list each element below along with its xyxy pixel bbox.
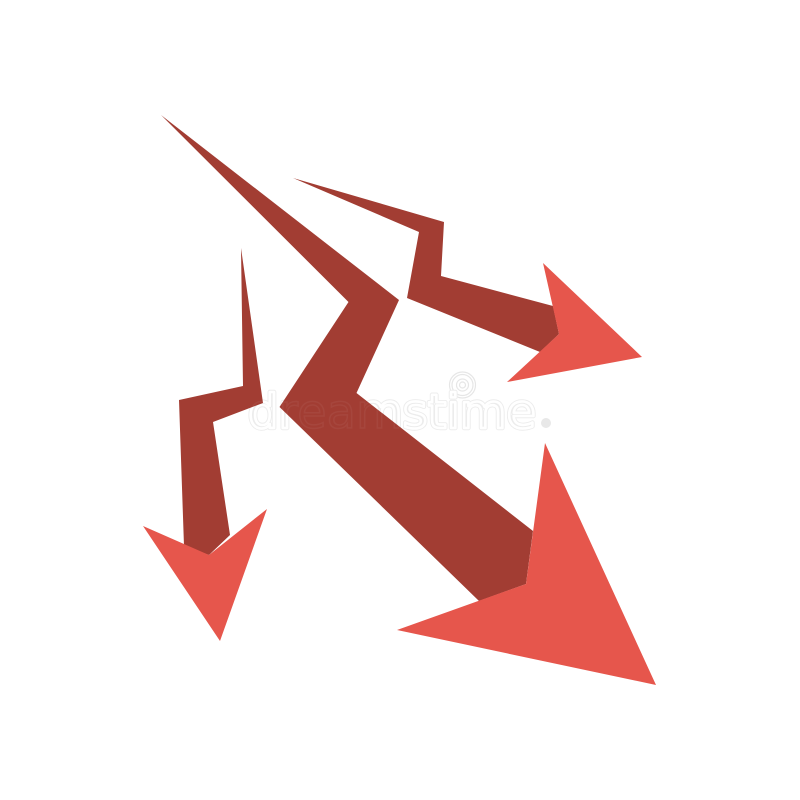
watermark wordmark outer stroke: dreamstime bbox=[248, 385, 536, 440]
arrow head: upper right bbox=[507, 263, 642, 382]
arrow shaft: left bbox=[179, 248, 263, 555]
arrow: large centre bbox=[161, 115, 656, 685]
arrow head: large bbox=[397, 443, 656, 685]
arrow head: left bbox=[143, 509, 267, 641]
arrow: left bbox=[143, 248, 267, 641]
arrow shaft: upper right bbox=[293, 178, 559, 352]
watermark: dreamstime bbox=[248, 372, 551, 440]
arrow shaft: large bbox=[161, 115, 533, 601]
watermark wordmark inner stroke: dreamstime bbox=[248, 385, 536, 440]
watermark overlay on shapes: dreamstime bbox=[248, 385, 536, 440]
watermark registered mark bbox=[541, 418, 551, 428]
arrow: upper right bbox=[293, 178, 642, 382]
watermark icon: spiral bbox=[450, 372, 476, 398]
